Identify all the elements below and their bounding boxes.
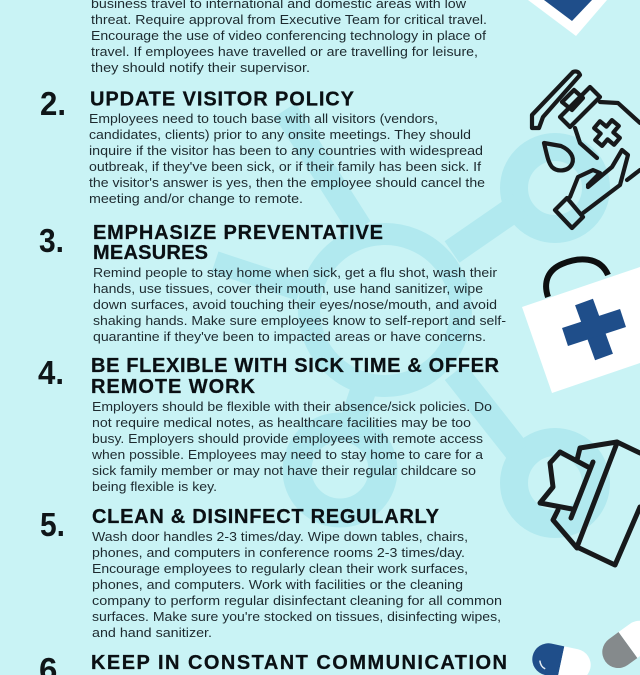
body text: Remind people to stay home when sick, get a flu shot, wash their [93, 265, 498, 280]
heading: MEASURES [93, 242, 208, 264]
background molecule pattern [215, 110, 596, 524]
heading: UPDATE VISITOR POLICY [90, 88, 355, 110]
icon: hand sanitizer [532, 71, 640, 228]
icon: shield badge top right [528, 0, 607, 36]
body text [92, 529, 502, 640]
heading: CLEAN & DISINFECT REGULARLY [92, 506, 440, 528]
icon: wipes box [540, 442, 640, 565]
section 4: flexible sick time and remote work [38, 354, 500, 494]
body text: surfaces. Make sure you're stocked on tissues, disinfecting wipes, [92, 609, 501, 624]
body text: Encourage the use of video conferencing technology in place of [91, 28, 486, 43]
number 4: 4. [38, 354, 64, 391]
icon: grey capsule [596, 614, 640, 674]
body text: Encourage employees to regularly clean their work surfaces, [92, 561, 468, 576]
body text: outbreak, if they've been sick, or if their family has been sick. If [89, 159, 481, 174]
body text [93, 265, 506, 344]
body text: busy. Employers should provide employees with remote access [92, 431, 483, 446]
body text: Employers should be flexible with their absence/sick policies. Do [92, 399, 492, 414]
heading: KEEP IN CONSTANT COMMUNICATION [91, 652, 507, 674]
body text: threat. Require approval from Executive Team for critical travel. [91, 12, 487, 27]
body text [89, 111, 485, 206]
body text: Wash door handles 2-3 times/day. Wipe down tables, chairs, [92, 529, 468, 544]
body text: travel. If employees have travelled or are travelling for leisure, [91, 44, 478, 59]
body text: company to perform regular disinfectant cleaning for all common [92, 593, 502, 608]
body text: the visitor's answer is yes, then the employee should cancel the [89, 175, 485, 190]
body text: not require medical notes, as healthcare facilities may be too [92, 415, 471, 430]
section 2: update visitor policy [40, 85, 485, 206]
body text: sick family member or may not have their regular childcare so [92, 463, 476, 478]
heading: EMPHASIZE PREVENTATIVE [93, 222, 383, 244]
kit cross [565, 302, 623, 357]
body text [91, 399, 492, 494]
number 5: 5. [40, 506, 65, 543]
kit body [522, 267, 640, 393]
body text [91, 0, 487, 75]
heading: REMOTE WORK [91, 376, 256, 398]
body text: phones, and computers in conference rooms 2-3 times/day. [92, 545, 465, 560]
heading [91, 355, 500, 398]
section 1: travel policy text [91, 0, 487, 75]
section 5: clean and disinfect regularly [40, 506, 502, 640]
body text: meeting and/or change to remote. [89, 191, 303, 206]
heading: BE FLEXIBLE WITH SICK TIME & OFFER [91, 355, 500, 377]
section 6: keep in constant communication [39, 651, 507, 675]
body text: being flexible is key. [92, 479, 217, 494]
body text: phones, and computers. Work with facilities or the cleaning [92, 577, 463, 592]
body text: quarantine if they've been to impacted areas or have concerns. [93, 329, 486, 344]
heading [93, 222, 383, 264]
body text: down surfaces, avoid touching their eyes/nose/mouth, and avoid [93, 297, 497, 312]
kit handle [546, 259, 608, 297]
section 3: emphasize preventative measures [39, 222, 506, 344]
body text: shaking hands. Make sure employees know to self-report and self- [93, 313, 506, 328]
body text: candidates, clients) prior to any onsite meetings. They should [89, 127, 471, 142]
body text: Employees need to touch base with all visitors (vendors, [89, 111, 438, 126]
body text: they should notify their supervisor. [91, 60, 310, 75]
number 3: 3. [39, 222, 64, 259]
body text: inquire if the visitor has been to any countries with widespread [89, 143, 483, 158]
icon: blue capsule [529, 640, 594, 675]
body text: and hand sanitizer. [92, 625, 212, 640]
body text: when possible. Employees may need to stay home to care for a [91, 447, 484, 462]
number 2: 2. [40, 85, 66, 122]
body text: hands, use tissues, cover their mouth, use hand sanitizer, wipe [93, 281, 483, 296]
icon: first aid kit [522, 259, 640, 393]
